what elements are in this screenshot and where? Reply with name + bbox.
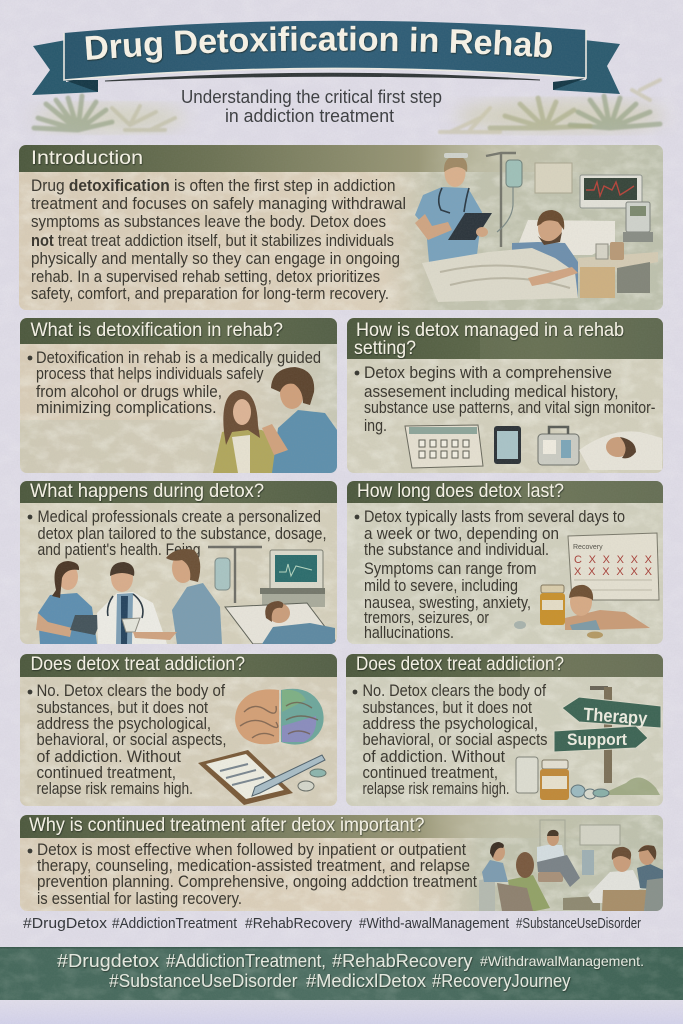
heading bar: Does detox treat addiction? bbox=[30, 653, 245, 675]
body text bbox=[28, 508, 326, 559]
panel: does detox treat addiction (brain) bbox=[20, 653, 337, 806]
heading bar: What is detoxification in rehab? bbox=[30, 319, 283, 341]
hashtag row: #Withd-awalManagement bbox=[359, 915, 510, 932]
illustration: group therapy session bbox=[479, 820, 663, 911]
hashtag row: #SubstanceUseDisorder bbox=[516, 915, 641, 932]
subtitle: in addiction treatment bbox=[225, 106, 394, 126]
hashtag row: #AddictionTreatment bbox=[112, 915, 238, 932]
heading bar bbox=[20, 814, 663, 838]
panel: introduction bbox=[19, 145, 663, 310]
body text: hallucinations. bbox=[364, 624, 454, 642]
icon: heart monitor bbox=[580, 175, 653, 242]
icon: patient lying in bed bbox=[225, 601, 335, 644]
icon: calendar bbox=[405, 425, 483, 468]
body text: behavioral, or social aspects, bbox=[36, 731, 226, 749]
body text: of addiction. Without bbox=[362, 748, 505, 766]
body text: the substance and individual. bbox=[364, 541, 549, 559]
footer band with hashtags: #Drugdetox bbox=[57, 950, 160, 971]
icon: nurse with clipboard bbox=[415, 153, 492, 262]
icon: vitals monitor bbox=[260, 550, 325, 607]
panel: what is detoxification bbox=[20, 318, 337, 473]
icon: wall calendar with crossed days: XXXXXX bbox=[574, 566, 653, 578]
panel: why is continued treatment important bbox=[20, 814, 663, 911]
icon: third clinician bbox=[133, 549, 222, 644]
body text bbox=[355, 364, 656, 435]
sign: support: Support bbox=[567, 730, 627, 749]
subtitle bbox=[181, 87, 442, 126]
body text: substances, but it does not bbox=[362, 699, 532, 717]
illustration: nurse and patient in hospital room bbox=[415, 153, 658, 302]
illustration: counselor and woman bbox=[213, 367, 337, 473]
icon: bedside table bbox=[578, 242, 658, 298]
heading bar: How is detox managed in a rehab bbox=[356, 319, 624, 341]
body text: Symptoms can range from bbox=[364, 560, 536, 578]
heading bar: How long does detox last? bbox=[357, 480, 564, 502]
icon: wall calendar with crossed days: CXXXXX bbox=[574, 554, 653, 566]
hashtag row: #DrugDetox bbox=[23, 915, 108, 932]
icon: seated group right bbox=[563, 845, 663, 911]
footer band with hashtags bbox=[0, 947, 683, 1000]
intro body text: treatment and focuses on safely managing withdrawal bbox=[31, 195, 406, 213]
icon: two-colored brain bbox=[235, 689, 324, 745]
body text bbox=[28, 841, 477, 908]
body text: relapse risk remains high. bbox=[36, 780, 193, 798]
title ribbon banner bbox=[32, 20, 620, 95]
footer band with hashtags: #WithdrawalManagement. bbox=[480, 953, 644, 969]
body text bbox=[353, 682, 548, 798]
body text: continued treatment, bbox=[36, 764, 176, 782]
heading bar: What happens during detox? bbox=[30, 480, 264, 502]
hashtag row: #RehabRecovery bbox=[245, 915, 352, 932]
body text: from alcohol or drugs while, bbox=[36, 383, 222, 401]
body text: ing. bbox=[364, 417, 387, 435]
ribbon right tail bbox=[553, 40, 620, 94]
icon: clipboard and pen bbox=[198, 750, 326, 805]
icon: therapist bbox=[537, 830, 580, 887]
footer band with hashtags: #MedicxlDetox bbox=[306, 970, 427, 991]
intro body text: Drug detoxification is often the first step in addiction bbox=[31, 177, 396, 195]
heading bar: Does detox treat addiction? bbox=[356, 653, 564, 675]
body text: therapy, counseling, medication-assisted treatment, and relapse bbox=[37, 857, 470, 875]
footer band with hashtags: #RecoveryJourney bbox=[432, 970, 571, 991]
sign: therapy: Therapy bbox=[583, 704, 648, 728]
intro body text: rehab. In a supervised rehab setting, detox prioritizes bbox=[31, 268, 380, 286]
body text: mild to severe, including bbox=[364, 577, 518, 595]
body text: a week or two, depending on bbox=[364, 525, 559, 543]
body text: tremors, seizures, or bbox=[364, 609, 489, 627]
heading bar bbox=[346, 653, 663, 677]
body text: Detox begins with a comprehensive bbox=[364, 364, 612, 382]
intro body text: symptoms as substances leave the body. Detox does bbox=[31, 213, 386, 231]
body text: process that helps individuals safely bbox=[36, 365, 264, 383]
subtitle: Understanding the critical first step bbox=[181, 87, 442, 107]
panel: how is detox managed bbox=[347, 318, 663, 473]
intro body text: not treat treat addiction itself, but it stabilizes individuals bbox=[31, 232, 394, 250]
intro body text bbox=[31, 177, 406, 303]
body text: detox plan tailored to the substance, dosage, bbox=[38, 525, 326, 543]
panel: what happens during detox bbox=[20, 480, 337, 644]
footer band with hashtags: #AddictionTreatment, bbox=[166, 950, 326, 971]
icon: wall calendar with crossed days bbox=[568, 533, 659, 600]
icon: pill jar bbox=[540, 585, 565, 625]
body text: No. Detox clears the body of bbox=[36, 682, 225, 700]
ribbon main band bbox=[64, 21, 586, 80]
body text: Detox is most effective when followed by inpatient or outpatient bbox=[37, 841, 466, 859]
body text: address the psychological, bbox=[36, 715, 211, 733]
icon: tablet bbox=[494, 426, 521, 464]
heading bar: setting? bbox=[354, 337, 416, 359]
body text: substances, but it does not bbox=[36, 699, 208, 717]
body text: of addiction. Without bbox=[36, 748, 181, 766]
icon: nurse bbox=[36, 561, 103, 644]
footer band with hashtags: #SubstanceUseDisorder bbox=[109, 970, 298, 991]
icon: sick patient bbox=[514, 585, 650, 638]
body text: behavioral, or social aspects bbox=[362, 731, 548, 749]
body text: Medical professionals create a personalized bbox=[38, 508, 321, 526]
intro heading bar bbox=[19, 145, 540, 172]
icon: medical bag bbox=[538, 427, 579, 465]
body text: minimizing complications. bbox=[36, 399, 216, 417]
body text: relapse risk remains high. bbox=[362, 780, 510, 798]
hashtag row bbox=[23, 915, 641, 932]
intro body text: physically and mentally so they can engage in ongoing bbox=[31, 250, 400, 268]
foliage: left bbox=[34, 96, 185, 132]
body text: assesement including medical history, bbox=[364, 383, 618, 401]
ribbon left tail bbox=[32, 40, 98, 95]
icon: IV drip stand bbox=[208, 547, 262, 603]
foliage: right bbox=[440, 80, 665, 132]
heading bar bbox=[347, 480, 663, 503]
intro heading bar: Introduction bbox=[31, 147, 143, 169]
icon: doctor bbox=[97, 562, 167, 644]
panel: does detox treat addiction (signpost) bbox=[346, 653, 663, 806]
body text bbox=[355, 508, 625, 642]
icon: IV pole and bag bbox=[486, 153, 522, 247]
title: Drug Detoxification in Rehab bbox=[86, 26, 553, 64]
body text: Detox typically lasts from several days to bbox=[364, 508, 625, 526]
icon: medicine bottles and pills bbox=[516, 757, 609, 800]
panel: how long does detox last bbox=[347, 480, 663, 644]
body text: prevention planning. Comprehensive, ongoing addction treatment bbox=[37, 873, 477, 891]
icon: patient in bed bbox=[422, 210, 615, 302]
heading bar bbox=[20, 653, 337, 677]
icon: signpost bbox=[554, 686, 661, 795]
heading bar bbox=[347, 318, 663, 359]
heading bar: Why is continued treatment after detox important? bbox=[29, 814, 425, 836]
illustration: care team at bedside bbox=[36, 547, 335, 644]
body text: No. Detox clears the body of bbox=[362, 682, 546, 700]
body text: Detoxification in rehab is a medically guided bbox=[36, 349, 321, 367]
intro body text: safety, comfort, and preparation for long-term recovery. bbox=[31, 285, 389, 303]
body text: nausea, swesting, anxiety, bbox=[364, 594, 531, 612]
body text bbox=[28, 682, 226, 798]
icon: wall calendar with crossed days: Recovery bbox=[573, 544, 603, 551]
footer band with hashtags: #RehabRecovery bbox=[332, 950, 473, 971]
body text: is essential for lasting recovery. bbox=[37, 890, 242, 908]
icon: seated group left bbox=[479, 842, 550, 911]
icon: sleeping patient bbox=[579, 431, 662, 470]
body text: continued treatment, bbox=[362, 764, 498, 782]
body text: and patient's health. Feing bbox=[38, 541, 200, 559]
body text: address the psychological, bbox=[362, 715, 538, 733]
body text bbox=[28, 349, 321, 417]
